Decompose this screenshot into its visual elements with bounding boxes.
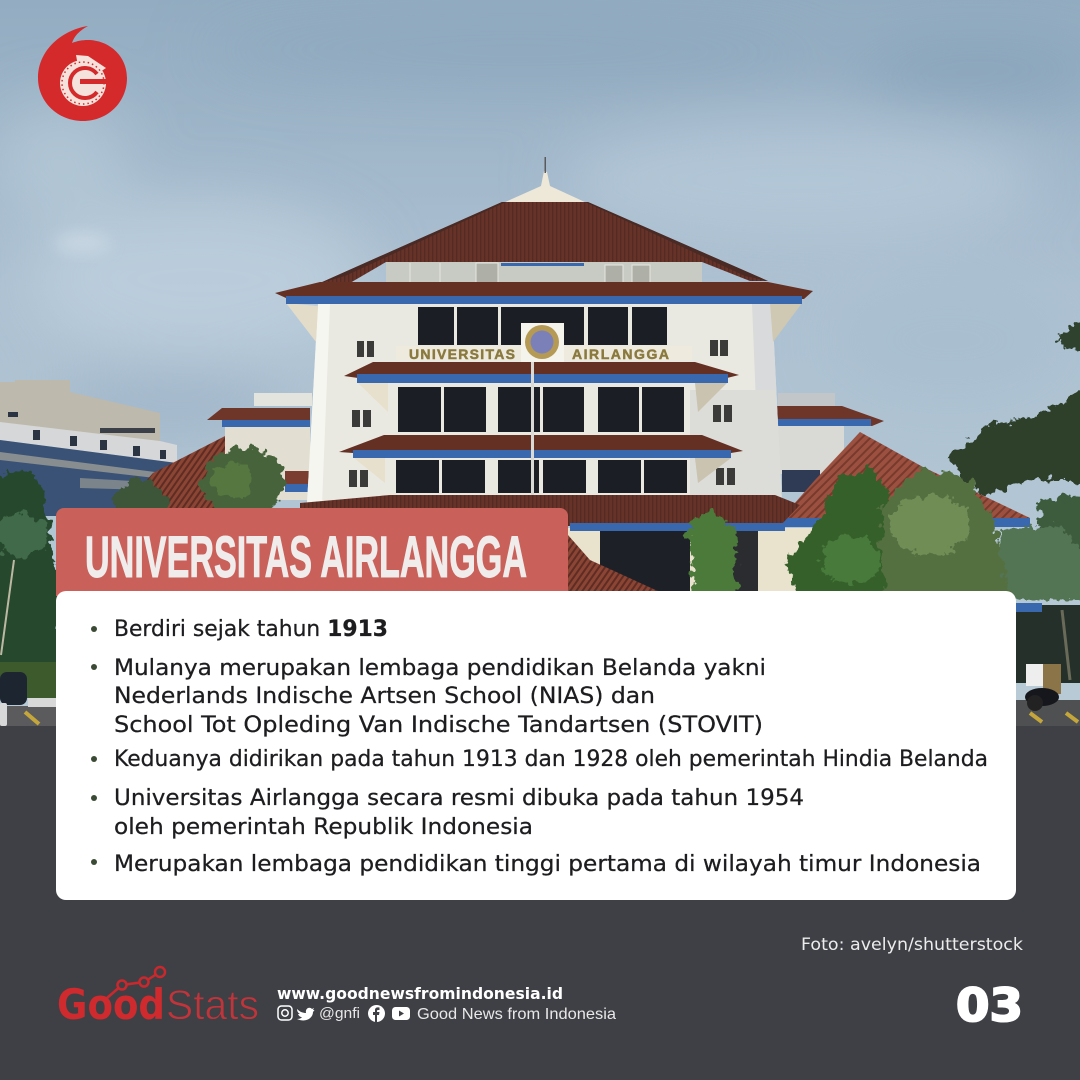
social icons and handles: @gnfi [319,1006,360,1022]
social icons and handles [278,1005,616,1023]
icon: rising line chart [107,967,165,998]
podium tree [688,510,738,600]
icon: twitter [297,1008,314,1020]
logo: red swirl with G emblem [38,26,127,121]
broadleaf tree [785,468,888,600]
left wing [207,393,312,500]
building sign and emblem: UNIVERSITAS [409,346,515,362]
second and third eaves [339,362,743,506]
right wing and low roof [760,393,1030,527]
left trees [0,470,62,670]
lower right shade [1016,605,1080,683]
left low roof [120,435,245,510]
bullet: opened 1954: Universitas Airlangga secara resmi dibuka pada tahun 1954 [114,786,804,811]
upper eave [275,282,813,342]
bottom dark band [0,726,1080,1080]
main roof [320,157,768,283]
photo credit: Foto: avelyn/shutterstock [801,935,1023,954]
bullet: origins: Nederlands Indische Artsen School (NIAS) dan [114,684,655,709]
info card [56,591,1016,900]
background photo: campus building [0,0,1080,726]
left office building [0,380,177,516]
bullet: origins: School Tot Opleding Van Indische Tandartsen (STOVIT) [114,713,763,738]
bullet: opened 1954 [91,786,804,840]
bullet: origins: Mulanya merupakan lembaga pendidikan Belanda yakni [114,656,766,681]
social icons and handles: Good News from Indonesia [417,1006,616,1023]
page number: 03 [956,979,1023,1032]
icon: youtube [392,1007,410,1020]
fan palm [880,470,1010,600]
sky with clouds [0,0,1080,726]
icon: facebook [368,1005,385,1022]
left round tree [201,448,285,516]
left hedge [0,662,56,698]
bullet: both founded: Keduanya didirikan pada tahun 1913 dan 1928 oleh pemerintah Hindia Belanda [114,747,988,772]
title banner [56,508,568,596]
bullet: first in east: Merupakan lembaga pendidikan tinggi pertama di wilayah timur Indonesia [114,852,981,877]
left palm [112,478,170,515]
main tower body [307,304,782,504]
road, car and motorbike [0,603,1080,726]
GoodStats logo: Good [57,980,165,1029]
title banner: UNIVERSITAS AIRLANGGA [85,525,527,590]
trees and foliage [0,325,1080,698]
window rows [396,307,687,493]
bullet: origins [91,656,766,738]
icon: instagram [278,1006,292,1020]
building sign and emblem [396,323,692,362]
website url: www.goodnewsfromindonesia.id [277,984,563,1003]
bullet: founded: Berdiri sejak tahun 1913 [114,617,388,642]
lower podium [300,495,823,592]
bullet: opened 1954: oleh pemerintah Republik Indonesia [114,815,533,840]
GoodStats logo: Stats [166,981,259,1028]
small side windows [349,340,735,487]
building sign and emblem: AIRLANGGA [572,346,669,362]
right canopy [948,385,1080,495]
GoodStats logo [57,967,259,1029]
